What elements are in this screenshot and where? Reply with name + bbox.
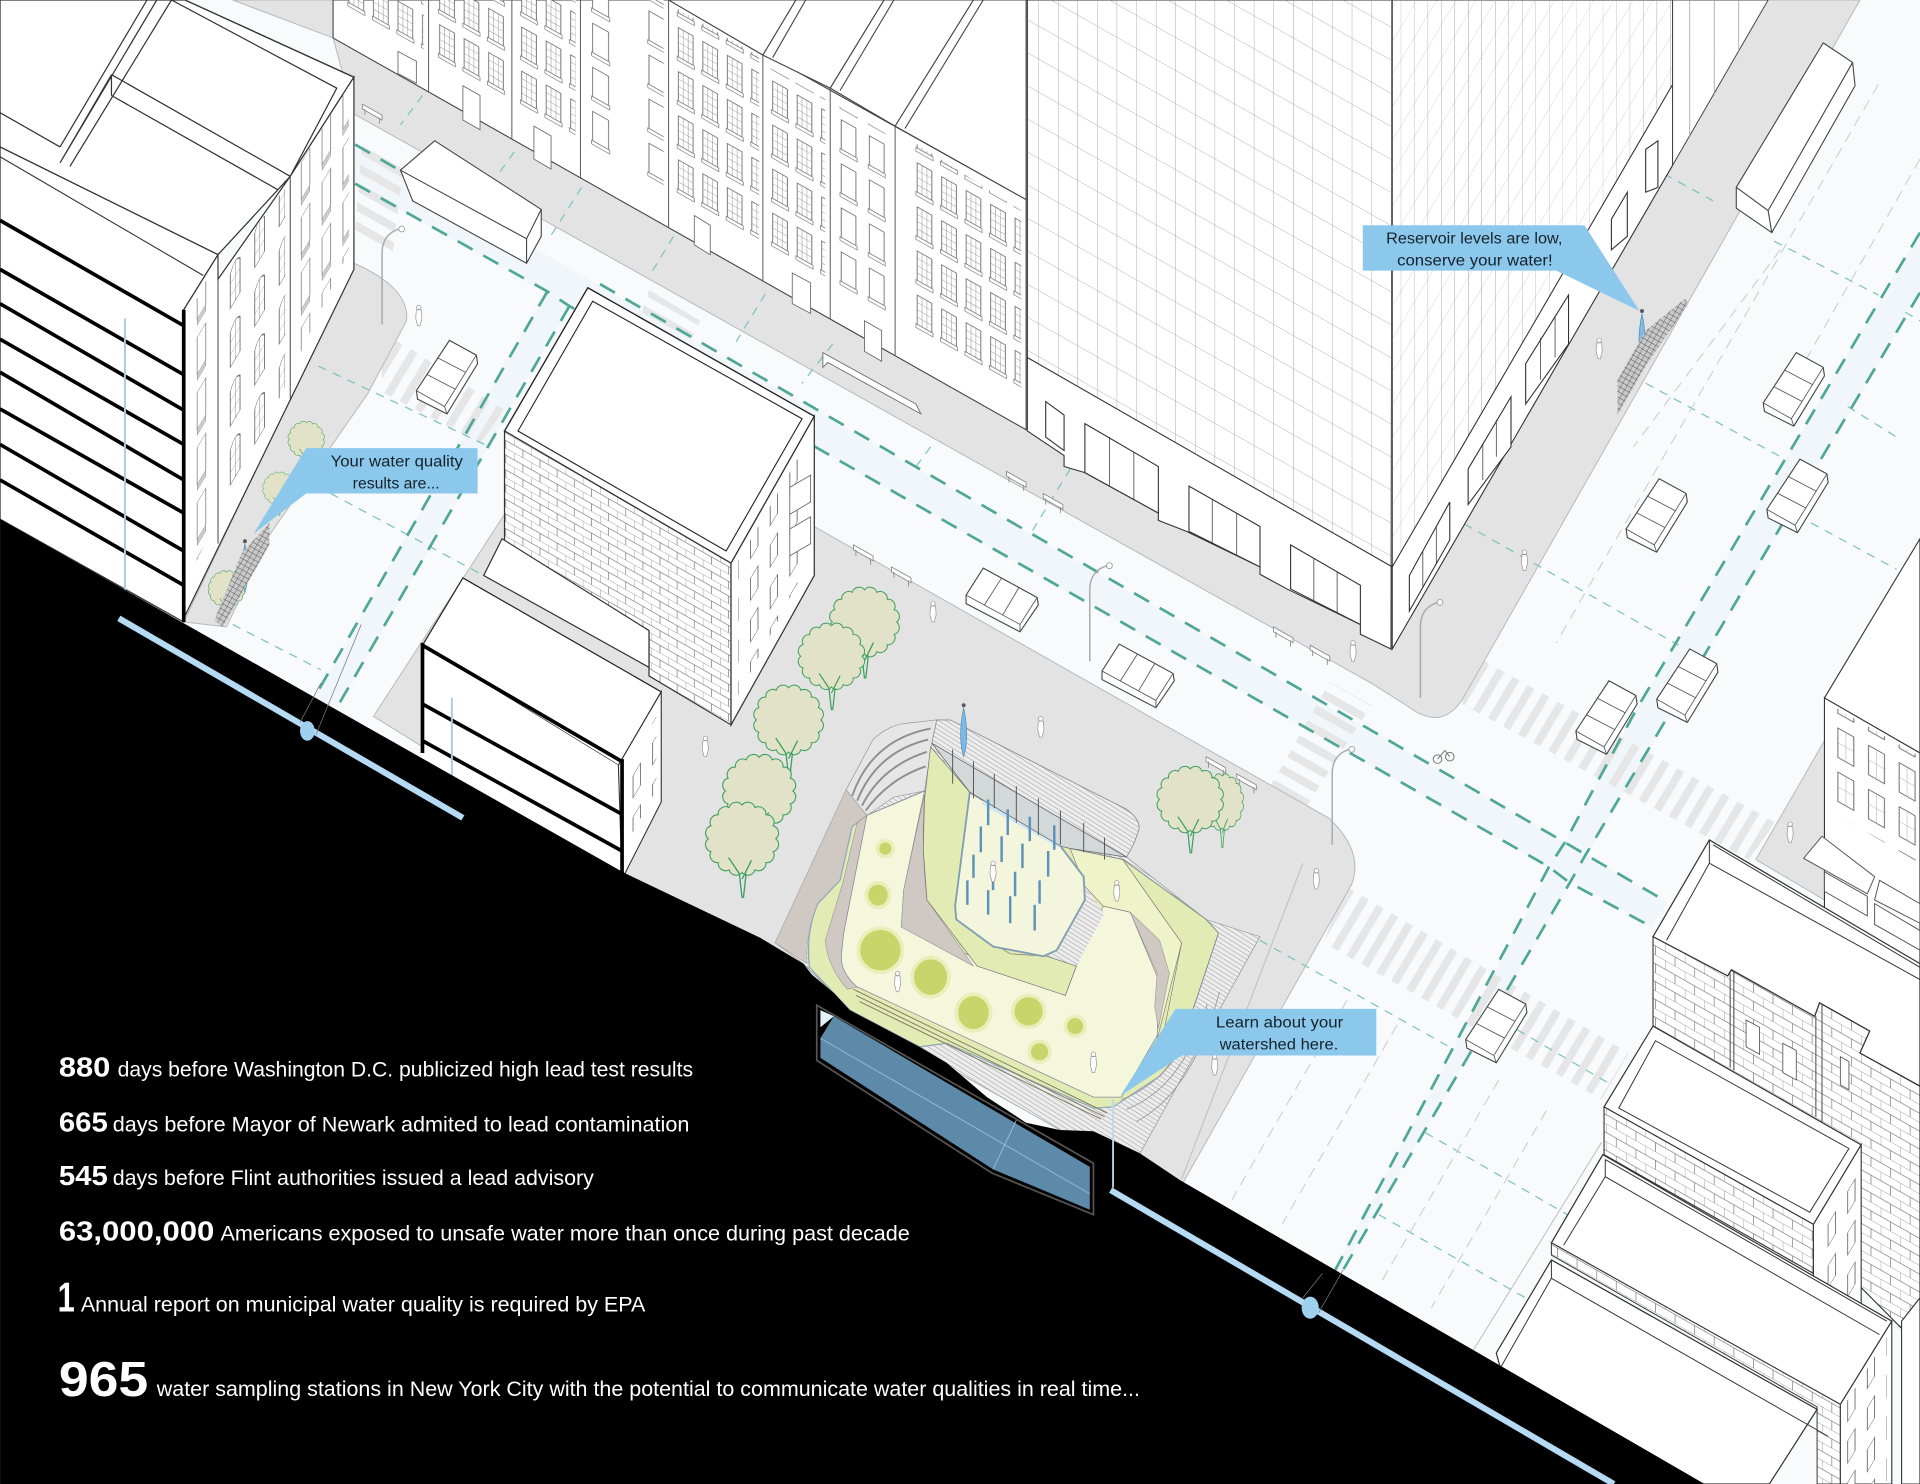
stat: 880 days: days before Washington D.C. publicized high lead test results [118,1058,693,1081]
stat: 880 days: 880 [59,1051,110,1082]
stat: 1 annual report [58,1273,645,1320]
bicycle [1433,751,1454,763]
mesh paving at the water quality station [214,523,269,627]
cars [416,340,1828,1063]
building far right top [1804,539,1920,967]
curb lines [1182,863,1602,1351]
stat: 1 annual report: Annual report on municipal water quality is required by EPA [81,1293,645,1316]
stat: 880 days [59,1051,693,1082]
water pipes underground [119,618,1614,1484]
row house roofs [669,0,1026,200]
callout: reservoir levels: conserve your water! [1397,253,1553,270]
roof in the foreground [1496,1260,1828,1484]
black ground section [0,519,1704,1484]
side wall with windows [184,77,354,618]
vertical water riser [124,318,126,618]
section building at left with black floor plates [0,0,354,622]
stat: 63,000,000 Americans [59,1215,910,1246]
taupe outer strip [825,815,867,989]
plaza [775,720,1260,1153]
crosswalks [355,137,1775,1100]
gray dashed traffic lane lines [1232,84,1920,1308]
stat: 1 annual report: 1 [58,1273,75,1320]
stat: 63,000,000 Americans: Americans exposed to unsafe water more than once during past decade [220,1222,910,1245]
water strip [982,797,1063,849]
pale lawn [841,791,1158,1097]
glass wall [932,743,1127,857]
central oval fountain floor [955,792,1085,956]
brick wall [505,431,731,725]
bus [1736,43,1855,233]
underground reservoir tank [817,1005,1093,1215]
inner taupe ramp [901,795,973,966]
taupe ramp [775,790,867,964]
callout: watershed: Learn about your [1216,1014,1344,1031]
callout: water quality results: Your water quality [331,454,463,471]
row houses along the north side [333,0,1026,430]
stat: 545 days: 545 [59,1160,108,1191]
tower front face [1027,0,1392,649]
far corner building [1902,1298,1920,1484]
plaza riser [1112,1100,1114,1188]
right fan stair lines [1122,992,1220,1122]
hatched wall top [932,720,1139,857]
lower pipe [1111,1190,1614,1484]
stat: 665 days: 665 [59,1106,108,1137]
stepped seating arcs [846,720,937,815]
stat: 665 days: days before Mayor of Newark admited to lead contamination [113,1113,689,1136]
trees [208,421,1244,898]
brick building three [1551,1155,1892,1484]
stat: 545 days [59,1160,595,1191]
bottom right brick buildings [1496,539,1920,1484]
roof [505,288,814,563]
right green zone pale [1070,849,1182,1040]
building north of tower side [1673,0,1768,165]
callout: reservoir levels [1363,225,1640,311]
stat: 965 stations: water sampling stations in New York City with the potential to communicate water qualities in real time... [156,1378,1140,1401]
brick building in the middle [505,288,814,725]
statistics text block [58,1051,1140,1407]
plaza people [894,971,901,992]
mesh paving at the reservoir station [1618,299,1689,415]
callout: watershed: watershed here. [1219,1036,1338,1053]
section building in the middle [422,539,661,882]
tower right face [1392,0,1673,649]
doors and awning [398,51,921,414]
sidewalks [184,0,1861,1185]
stat: 965 stations: 965 [59,1353,148,1407]
fountain water jets [967,800,1054,931]
green base landform [809,791,1218,1108]
right taupe sliver [1130,912,1169,1029]
fence posts [953,749,1104,860]
plaza hatched footprint [775,720,1260,1153]
water station markers [242,309,1645,757]
stepped hatch beside oval [1047,886,1104,966]
side wall and balconies [731,416,814,725]
box truck [400,141,541,263]
planting basins [858,841,1085,1062]
folded green flap [923,747,1076,995]
callout: watershed [1120,1009,1376,1096]
brick pilasters and windows [1730,971,1822,1122]
callout: reservoir levels: Reservoir levels are low, [1386,231,1562,248]
stat: 665 days [59,1106,689,1137]
awnings [1804,836,1920,950]
storefront windows [1046,141,1658,624]
bold dashed teal water mains [300,144,1920,1294]
bottom edge stripes [853,989,1107,1119]
stat: 965 stations [59,1353,1140,1407]
stat: 63,000,000 Americans: 63,000,000 [59,1215,214,1246]
floor plates [0,220,184,622]
thin dashed teal sampling grid lines [233,96,1920,1298]
left pipe [119,618,463,818]
street bands: pale water main corridors [300,144,1920,1294]
pipe valves [300,721,1319,1319]
brick building one [1653,840,1920,1347]
facades with windows [345,0,424,56]
callout: water quality results [254,448,478,534]
high-rise tower [1027,0,1673,649]
brick building two [1604,1026,1861,1322]
callout: water quality results: results are... [353,476,440,493]
stat: 545 days: days before Flint authorities issued a lead advisory [113,1167,595,1190]
right green flap [1123,860,1218,1029]
back roof [484,539,649,667]
back roofs [0,0,354,255]
street furniture and people [362,104,1793,1075]
